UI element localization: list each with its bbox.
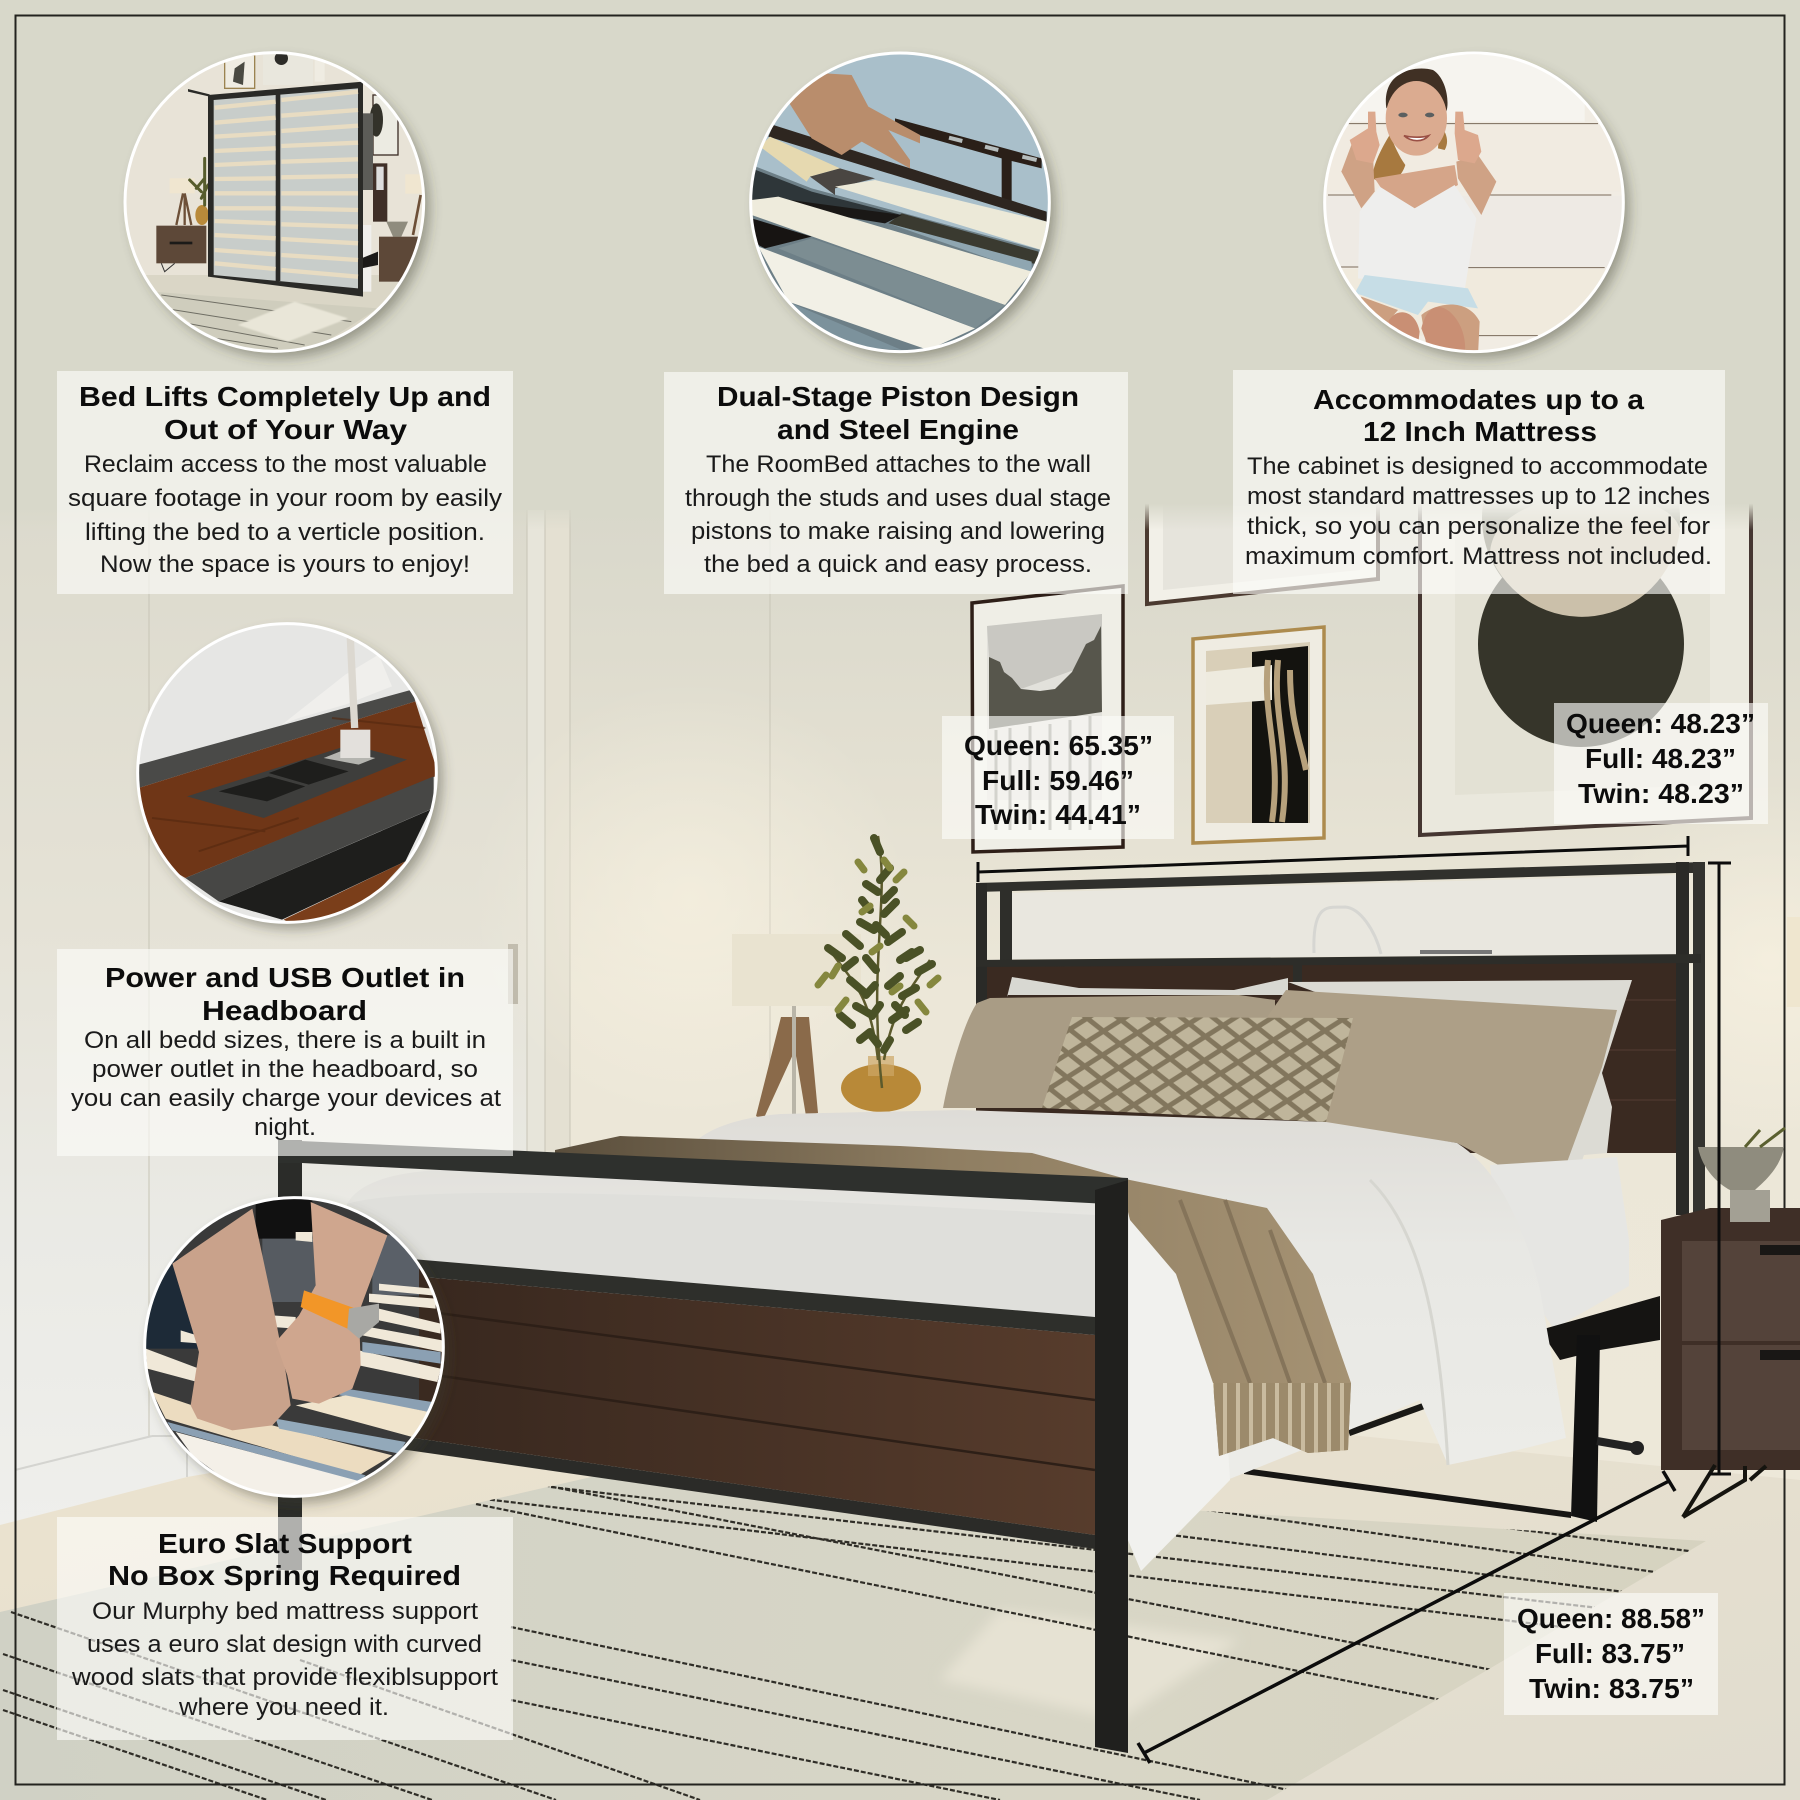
panel: power and USB <box>57 949 513 1156</box>
dimension line: height <box>1708 863 1731 1474</box>
plant in amber vase <box>818 836 938 1112</box>
callout: length dimensions: Queen: 88.58” <box>1517 1603 1705 1634</box>
duvet <box>347 1110 1566 1571</box>
callout: width dimensions: Queen: 65.35” <box>964 730 1153 761</box>
wall art: fringe print <box>972 586 1123 852</box>
panel: power and USB: power outlet in the headboard, so <box>92 1056 478 1083</box>
panel: euro slat: Euro Slat Support <box>158 1528 412 1559</box>
callout: height dimensions: Twin: 48.23” <box>1578 778 1744 809</box>
panel: power and USB: On all bedd sizes, there is a built in <box>84 1027 486 1054</box>
mattress <box>1490 1157 1629 1329</box>
panel: 12 inch mattress <box>1233 370 1725 594</box>
callout: width dimensions: Twin: 44.41” <box>975 799 1141 830</box>
footboard <box>278 1140 1128 1753</box>
top wall fade <box>0 0 1800 530</box>
panel: 12 inch mattress: most standard mattresses up to 12 inches <box>1247 483 1710 510</box>
callout: length dimensions: Twin: 83.75” <box>1529 1673 1694 1704</box>
panel: 12 inch mattress: maximum comfort. Mattress not included. <box>1245 543 1712 570</box>
rug with stripes <box>0 1477 1706 1800</box>
panel: bed lifts <box>57 371 513 594</box>
photo circle: piston and slats <box>745 45 1055 355</box>
photo circle: woman on mattress <box>1318 45 1628 355</box>
panel: bed lifts: Bed Lifts Completely Up and <box>79 381 491 412</box>
panel: dual-stage piston: the bed a quick and easy process. <box>704 551 1092 578</box>
panel: dual-stage piston: pistons to make raising and lowering <box>691 518 1105 545</box>
dimension line: length <box>1138 1471 1675 1763</box>
nightstand with bowl <box>1661 1128 1800 1517</box>
panel: bed lifts: Reclaim access to the most valuable <box>84 451 487 478</box>
panel: euro slat: uses a euro slat design with curved <box>87 1631 482 1658</box>
panel: dual-stage piston <box>664 372 1128 594</box>
wall art: top middle frame <box>1147 500 1378 604</box>
callout: width dimensions: Full: 59.46” <box>982 765 1134 796</box>
photo circle: bed lifted vertically <box>118 45 428 355</box>
panel: euro slat: Our Murphy bed mattress support <box>92 1598 478 1625</box>
throw blanket <box>555 1136 1351 1456</box>
dimension line: headboard width <box>978 836 1688 882</box>
callout: width dimensions <box>942 716 1174 839</box>
callout: height dimensions: Full: 48.23” <box>1585 743 1736 774</box>
wall art: moon print <box>1420 419 1751 835</box>
callout: length dimensions: Full: 83.75” <box>1535 1638 1685 1669</box>
headboard <box>976 862 1705 1215</box>
panel: bed lifts: lifting the bed to a verticle position. <box>85 519 485 546</box>
panel: bed lifts: Out of Your Way <box>164 414 407 445</box>
panel: dual-stage piston: The RoomBed attaches to the wall <box>706 451 1091 478</box>
panel: power and USB: Power and USB Outlet in <box>105 962 465 993</box>
panel: dual-stage piston: Dual-Stage Piston Design <box>717 381 1079 412</box>
panel: euro slat <box>57 1517 513 1740</box>
panel: euro slat: No Box Spring Required <box>108 1560 461 1591</box>
panel: dual-stage piston: through the studs and uses dual stage <box>685 485 1111 512</box>
floor <box>0 1430 1800 1800</box>
under-bed frame <box>1244 1296 1660 1522</box>
photo circle: hands on euro slats <box>139 1192 449 1502</box>
panel: 12 inch mattress: The cabinet is designed to accommodate <box>1247 453 1708 480</box>
panel: euro slat: wood slats that provide flexiblsupport <box>71 1664 498 1691</box>
panel: bed lifts: square footage in your room by easily <box>68 485 502 512</box>
panel: 12 inch mattress: 12 Inch Mattress <box>1363 416 1597 447</box>
panel: 12 inch mattress: thick, so you can personalize the feel for <box>1247 513 1710 540</box>
photo circle: power outlet <box>132 618 442 928</box>
panel: power and USB: you can easily charge your devices at <box>71 1085 501 1112</box>
wall art: gold frame print <box>1193 627 1324 843</box>
callout: height dimensions: Queen: 48.23” <box>1566 708 1755 739</box>
panel: bed lifts: Now the space is yours to enjoy! <box>100 551 470 578</box>
table lamp <box>732 934 861 1120</box>
callout: height dimensions <box>1554 703 1768 824</box>
callout: length dimensions <box>1504 1593 1718 1715</box>
panel: dual-stage piston: and Steel Engine <box>777 414 1019 445</box>
panel: power and USB: Headboard <box>202 995 367 1026</box>
panel: euro slat: where you need it. <box>178 1694 389 1721</box>
panel: power and USB: night. <box>254 1114 316 1141</box>
pillows <box>943 977 1632 1195</box>
panel: 12 inch mattress: Accommodates up to a <box>1313 384 1644 415</box>
